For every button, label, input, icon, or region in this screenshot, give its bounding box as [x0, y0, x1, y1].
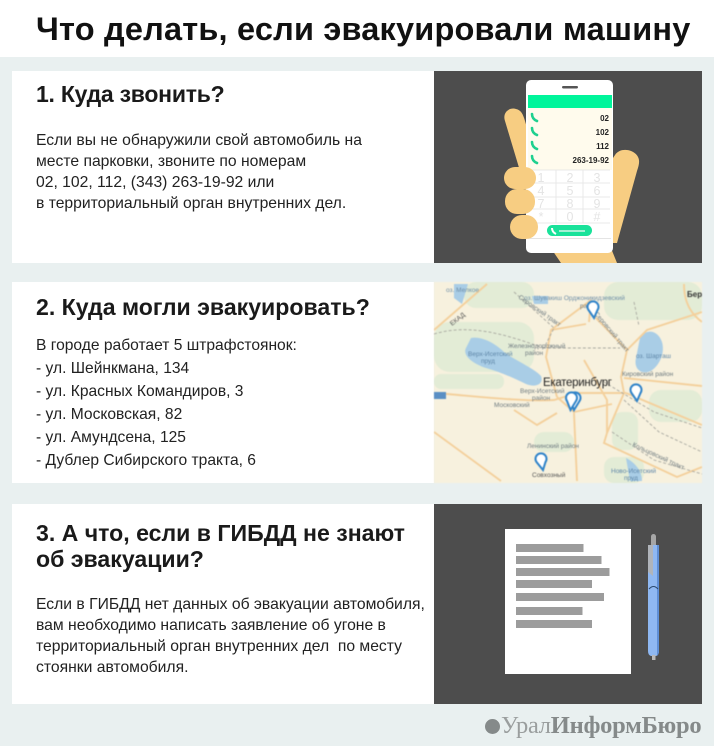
map labels: Московский — [494, 401, 530, 409]
map labels: Железнодорожный — [508, 342, 566, 350]
icon: phone: 3 — [594, 171, 601, 185]
text: impound lots list: В городе работает 5 штрафстоянок: — [36, 337, 297, 354]
icon: phone: # — [594, 210, 601, 224]
text: write a theft report: Если в ГИБДД нет данных об эвакуации автомобиля, — [36, 596, 425, 613]
icon: phone: 6 — [594, 184, 601, 198]
text: impound lots list: - ул. Шейнкмана, 134 — [36, 360, 189, 377]
icon: phone — [526, 80, 613, 253]
label: Берёзовский: Бер — [687, 290, 702, 299]
heading: where towed: 2. Куда могли эвакуировать? — [36, 294, 370, 320]
heading: if police do not know: 3. А что, если в ГИБДД не знают — [36, 520, 405, 546]
map labels: Совхозный — [532, 471, 566, 479]
text: where to call: 02, 102, 112, (343) 263-19-92 или — [36, 174, 274, 191]
map labels: Серовский тракт — [592, 310, 631, 354]
illustration: hand holding phone — [434, 71, 702, 263]
text: where to call: в территориальный орган внутренних дел. — [36, 195, 346, 212]
map labels: оз. Шувакиш Орджоникидзевский — [524, 294, 625, 302]
icon: phone: 2 — [567, 171, 574, 185]
text: write a theft report — [36, 596, 425, 676]
text: write a theft report: территориальный орган внутренних дел по месту — [36, 638, 402, 655]
illustration: document and pen — [434, 504, 702, 704]
icon: phone: 9 — [594, 197, 601, 211]
text: where to call: Если вы не обнаружили свой автомобиль на — [36, 132, 362, 149]
map labels: Кольцовский тракт — [631, 441, 686, 472]
map labels: район — [525, 349, 543, 357]
text: where to call: месте парковки, звоните по номерам — [36, 153, 306, 170]
map labels: район — [580, 302, 598, 310]
call button — [547, 225, 592, 236]
icon: pen — [648, 534, 659, 660]
title: Что делать, если эвакуировали машину — [36, 11, 691, 47]
fingertips over phone — [504, 167, 538, 239]
map labels: оз. Мелкое — [446, 287, 479, 294]
icon: document — [505, 529, 631, 674]
map labels: пруд — [624, 475, 638, 482]
icon: hand — [504, 109, 639, 263]
text: impound lots list: - ул. Московская, 82 — [36, 406, 182, 423]
text: impound lots list: - Дублер Сибирского тракта, 6 — [36, 452, 256, 469]
map labels: Кировский район — [622, 370, 674, 378]
icon: phone: 5 — [567, 184, 574, 198]
map labels: пруд — [481, 358, 495, 365]
phone numbers — [573, 114, 610, 165]
text: impound lots list: - ул. Амундсена, 125 — [36, 429, 186, 446]
icon: phone: 0 — [567, 210, 574, 224]
map labels: район — [532, 394, 550, 402]
icon: phone: * — [539, 210, 544, 224]
map labels: Ново-Исетский — [611, 467, 656, 475]
phone numbers: 102 — [596, 128, 610, 137]
panel: where to call — [12, 71, 434, 263]
icon: phone: 7 — [538, 197, 545, 211]
map labels: Ленинский район — [527, 442, 579, 450]
text: impound lots list — [36, 337, 297, 469]
map of Yekaterinburg — [433, 282, 703, 484]
lakes — [454, 284, 663, 481]
title — [0, 0, 714, 57]
heading: where to call: 1. Куда звонить? — [36, 81, 224, 107]
heading: if police do not know — [36, 520, 405, 572]
map labels: Верх-Исетский — [520, 387, 565, 395]
label: Екатеринбург: Екатеринбург — [543, 377, 612, 389]
keypad — [528, 170, 610, 223]
map labels: Серовский тракт — [517, 293, 563, 328]
panel: where it could be towed — [12, 282, 434, 483]
roads — [434, 284, 702, 481]
heading: if police do not know: об эвакуации? — [36, 546, 204, 572]
phone numbers: 02 — [600, 114, 610, 123]
panel: if traffic police do not know — [12, 504, 434, 704]
phone call icons — [532, 114, 537, 163]
phone numbers: 263-19-92 — [573, 156, 610, 165]
map labels: оз. Шарташ — [636, 353, 671, 360]
map labels — [446, 287, 686, 482]
icon: phone: 8 — [567, 197, 574, 211]
text: write a theft report: вам необходимо написать заявление об угоне в — [36, 617, 386, 634]
text: where to call — [36, 132, 362, 212]
map pins — [536, 301, 642, 470]
icon: phone: 1 — [538, 171, 545, 185]
map labels: ЕКАД — [449, 311, 467, 328]
icon: phone: 4 — [538, 184, 545, 198]
logo: UralInformBuro: УралИнформБюро — [501, 712, 701, 739]
text: write a theft report: стоянки автомобиля. — [36, 659, 188, 676]
text: impound lots list: - ул. Красных Командиров, 3 — [36, 383, 243, 400]
map labels: Верх-Исетский — [468, 350, 513, 358]
phone numbers: 112 — [596, 142, 610, 151]
